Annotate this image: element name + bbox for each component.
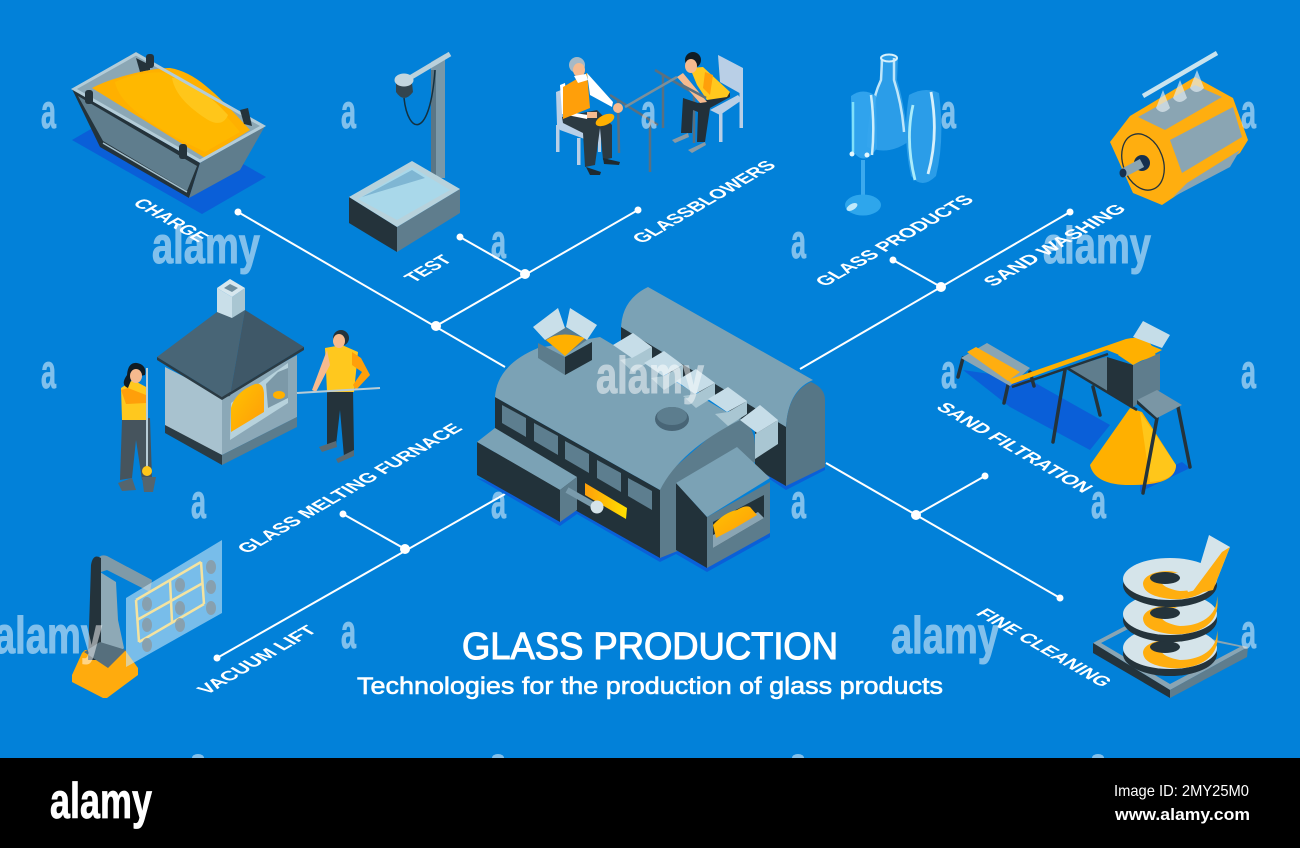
rear tunnel end (786, 382, 825, 486)
main body roof (495, 337, 740, 490)
footer: website: www.alamy.com (1114, 805, 1250, 824)
subtitle: Technologies for the production of glass products (357, 673, 943, 700)
watermarks: a (641, 86, 656, 139)
watermarks: a (341, 86, 356, 139)
central furnace (477, 287, 825, 572)
roof knob (655, 407, 689, 431)
furnace walls (165, 367, 222, 455)
watermarks: a (941, 86, 956, 139)
glass panel (126, 540, 222, 667)
platform (1137, 390, 1182, 418)
watermarks: a (491, 476, 506, 529)
label: sand filtration: SAND FILTRATION (931, 400, 1097, 496)
young man (672, 52, 730, 153)
watermarks: a (791, 216, 806, 269)
watermarks: a (1241, 346, 1256, 399)
connector: charge to furnace (234, 208, 505, 367)
label: glassblowers: GLASSBLOWERS (628, 158, 781, 247)
upright frame (1065, 357, 1107, 393)
wine glass (845, 92, 881, 216)
watermarks: alamy (891, 607, 999, 665)
connector: test and glassblowers (436, 206, 642, 326)
label: glass melting furnace: GLASS MELTING FURNACE (233, 421, 468, 557)
bottle (867, 54, 908, 151)
fire (231, 384, 264, 432)
watermarks: a (1241, 86, 1256, 139)
floor shadow (477, 478, 770, 572)
label: test: TEST (400, 252, 458, 286)
inclined belt (1008, 338, 1156, 384)
chimney (217, 288, 232, 318)
connector: sand filtration and fine cleaning (826, 463, 1064, 602)
watermarks: a (491, 216, 506, 269)
robot arm (96, 555, 152, 660)
icon: glass melting furnace (118, 279, 380, 492)
connector: furnace and vacuum lift (214, 494, 505, 662)
furnace window and rod (567, 483, 627, 519)
title: GLASS PRODUCTION (462, 626, 838, 668)
watermarks: a (41, 86, 56, 139)
icon: test stand (349, 54, 460, 252)
icon: glassblowers (556, 52, 743, 175)
cone of sand (1090, 408, 1176, 485)
watermarks: alamy (152, 217, 260, 275)
hopper box (533, 308, 597, 375)
watermarks: a (41, 346, 56, 399)
roof (157, 310, 245, 397)
vase (906, 90, 941, 183)
worker: woman with rod (118, 363, 156, 492)
watermarks: a (1091, 476, 1106, 529)
hopper (1107, 357, 1133, 407)
orange base (72, 650, 138, 698)
watermarks: alamy (596, 347, 704, 405)
watermarks: a (791, 476, 806, 529)
icon: glass products (845, 54, 941, 216)
rear tunnel opening (621, 322, 786, 486)
conveyor legs (958, 358, 1190, 493)
footer: alamy logo: alamy (50, 773, 152, 829)
left chair (556, 90, 601, 165)
handles (85, 54, 252, 159)
coil: top (1123, 535, 1230, 607)
icon: vacuum lift (72, 540, 222, 698)
low conveyor (961, 343, 1030, 386)
suction frame (136, 562, 204, 642)
connector: glass products and sand washing (800, 208, 1074, 369)
right chair (710, 55, 743, 142)
labels on the isometric floor (128, 158, 1132, 698)
rear tunnel shadow (756, 460, 825, 490)
conveyor dark slot (621, 327, 786, 445)
watermarks: a (1241, 606, 1256, 659)
label: sand washing: SAND WASHING (979, 201, 1132, 290)
watermarks: a (941, 346, 956, 399)
icon: sand washing drum (1110, 53, 1248, 205)
left step block (477, 428, 577, 522)
label: glass products: GLASS PRODUCTS (811, 192, 979, 290)
icon: sand filtration (958, 321, 1190, 493)
worker: man with rod (297, 330, 380, 463)
old man (560, 57, 677, 175)
watermarks: a (341, 606, 356, 659)
windows (502, 405, 652, 510)
table frame (610, 70, 700, 172)
watermarks: alamy (1043, 217, 1151, 275)
front firebox (676, 447, 770, 568)
icon: charge container (72, 52, 266, 214)
icon: fine cleaning spiral (1093, 535, 1248, 698)
label: fine cleaning: FINE CLEANING (971, 606, 1116, 690)
arch end band (660, 415, 755, 558)
main body front (495, 397, 660, 558)
coil: middle (1123, 593, 1218, 642)
label: vacuum lift: VACUUM LIFT (193, 623, 323, 698)
footer bar (0, 758, 1300, 848)
connector lines (214, 206, 1074, 662)
conveyor blocks (613, 333, 778, 459)
label: charge: CHARGE (128, 196, 213, 245)
rear tunnel roof (621, 287, 813, 427)
coil: bottom (1123, 627, 1218, 676)
watermarks (0, 86, 1256, 762)
watermarks: a (191, 476, 206, 529)
footer: image id: Image ID: 2MY25M0 (1114, 783, 1249, 800)
